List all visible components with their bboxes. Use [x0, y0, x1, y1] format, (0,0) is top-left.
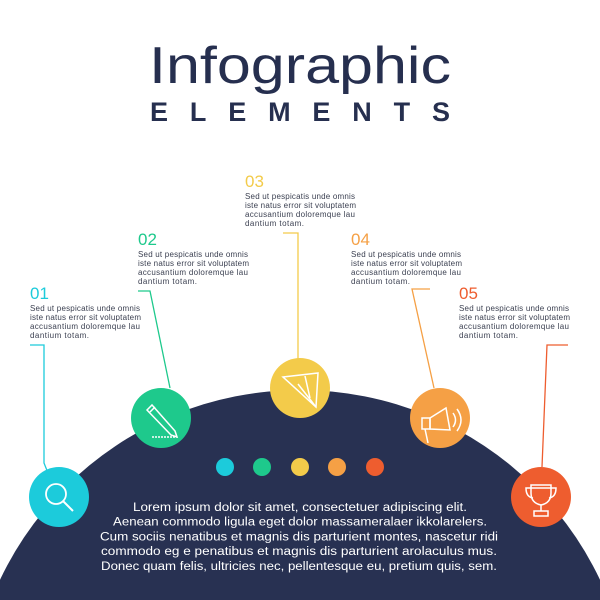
colour dots [216, 458, 384, 476]
icon: trophy [511, 467, 571, 527]
body text [100, 502, 501, 573]
step 01 text: iste natus error sit voluptatem [30, 313, 141, 322]
step 02 text: 02 [138, 230, 157, 249]
step 03 text: accusantium doloremque lau [245, 210, 355, 219]
title: ELEMENTS [150, 97, 450, 127]
step 03 text: iste natus error sit voluptatem [245, 201, 356, 210]
body text: Cum sociis nenatibus et magnis dis parturient montes, nascetur ridi [100, 531, 498, 543]
body text: Donec quam felis, ultricies nec, pellentesque eu, pretium quis, sem. [101, 561, 497, 573]
step 05 text [459, 284, 570, 340]
step 05 text: dantium totam. [459, 331, 518, 340]
step 01 text: Sed ut pespicatis unde omnis [30, 304, 140, 313]
step 01 text [30, 284, 141, 340]
step 03 text [245, 172, 356, 228]
step 02 text: iste natus error sit voluptatem [138, 259, 249, 268]
body text: commodo eg e penatibus et magnis dis parturient arolaculus mus. [101, 546, 497, 558]
step 03 text: 03 [245, 172, 264, 191]
step 04 text: dantium totam. [351, 277, 410, 286]
step 03 text: dantium totam. [245, 219, 304, 228]
step 02 text: accusantium doloremque lau [138, 268, 248, 277]
title: Infographic [149, 37, 451, 95]
step 05 text: accusantium doloremque lau [459, 322, 569, 331]
step 04 text: 04 [351, 230, 370, 249]
dark semicircle panel [0, 390, 600, 600]
step 01 text: 01 [30, 284, 49, 303]
step 02 text: dantium totam. [138, 277, 197, 286]
body text: Aenean commodo ligula eget dolor massameralaer ikkolarelers. [113, 517, 487, 529]
step 05 text: 05 [459, 284, 478, 303]
icon: paper plane [270, 358, 330, 418]
step 05 text: Sed ut pespicatis unde omnis [459, 304, 569, 313]
connector lines [30, 233, 568, 478]
icon: search [29, 467, 89, 527]
step 04 text: accusantium doloremque lau [351, 268, 461, 277]
step 02 text [138, 230, 249, 286]
step 01 text: accusantium doloremque lau [30, 322, 140, 331]
icon: megaphone [410, 388, 470, 448]
body text: Lorem ipsum dolor sit amet, consectetuer adipiscing elit. [133, 502, 467, 514]
step 01 text: dantium totam. [30, 331, 89, 340]
step 05 text: iste natus error sit voluptatem [459, 313, 570, 322]
step 04 text: Sed ut pespicatis unde omnis [351, 250, 461, 259]
step 02 text: Sed ut pespicatis unde omnis [138, 250, 248, 259]
step 04 text [351, 230, 462, 286]
step 03 text: Sed ut pespicatis unde omnis [245, 192, 355, 201]
title [149, 37, 451, 127]
step 04 text: iste natus error sit voluptatem [351, 259, 462, 268]
icon: pencil [131, 388, 191, 448]
